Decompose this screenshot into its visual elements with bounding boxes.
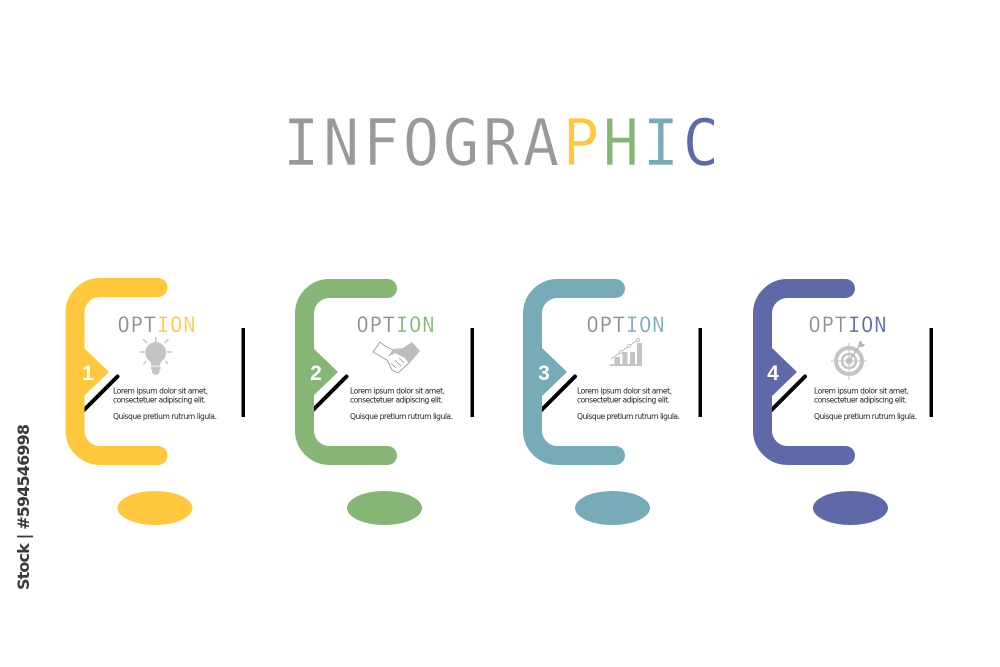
bracket 3	[532, 288, 616, 456]
diagonal line 3	[540, 376, 575, 412]
number 2: 2	[310, 362, 322, 385]
text block 1	[113, 386, 217, 421]
text block 4: consectetuer adipiscing elit.	[814, 396, 907, 404]
diagonal line 1	[82, 376, 118, 412]
text block 4	[814, 386, 917, 421]
number tab 4	[771, 347, 797, 397]
panel: option 4	[762, 288, 933, 525]
text block 1: Quisque pretium rutrum ligula.	[113, 412, 217, 421]
panel: option 3	[532, 288, 702, 525]
text block 2: consectetuer adipiscing elit.	[350, 396, 443, 404]
heading 4: OPTION	[808, 312, 887, 337]
text block 2: Lorem ipsum dolor sit amet,	[350, 386, 445, 396]
vertical line 2	[470, 328, 474, 417]
ellipse 4	[813, 491, 888, 525]
text block 2: Quisque pretium rutrum ligula.	[350, 412, 453, 421]
heading 2: OPTION	[356, 312, 435, 337]
text block 2	[350, 386, 453, 421]
text block 4: Quisque pretium rutrum ligula.	[814, 412, 917, 421]
ellipse 1	[118, 491, 192, 525]
number tab 2	[312, 347, 338, 397]
bracket 4	[762, 288, 846, 456]
number 4: 4	[767, 362, 779, 385]
text block 3: consectetuer adipiscing elit.	[577, 396, 670, 404]
text block 3: Quisque pretium rutrum ligula.	[577, 412, 680, 421]
panel: option 2	[304, 288, 474, 525]
number tab 3	[541, 347, 567, 397]
diagonal line 2	[311, 376, 346, 412]
vertical line 3	[698, 328, 702, 417]
ellipse 2	[347, 491, 422, 525]
text block 1: Lorem ipsum dolor sit amet,	[113, 386, 208, 396]
heading 1: OPTION	[118, 312, 196, 337]
number 3: 3	[538, 362, 550, 385]
stock id label: Stock | #594546998	[14, 424, 34, 590]
bracket 2	[304, 288, 388, 456]
ellipse 3	[575, 491, 650, 525]
text block 3	[577, 386, 680, 421]
bracket 1	[75, 288, 158, 456]
panel: option 1	[75, 288, 245, 525]
diagonal line 4	[770, 376, 805, 412]
text block 3: Lorem ipsum dolor sit amet,	[577, 386, 672, 396]
number 1: 1	[82, 362, 94, 385]
vertical line 1	[242, 328, 245, 417]
icon: handshake	[373, 342, 420, 373]
vertical line 4	[930, 328, 933, 417]
title: INFOGRAPHIC	[283, 105, 723, 180]
text block 4: Lorem ipsum dolor sit amet,	[814, 386, 909, 396]
icon: light bulb	[140, 337, 172, 375]
icon: target	[831, 341, 867, 380]
heading 3: OPTION	[586, 312, 665, 337]
number tab 1	[83, 347, 109, 397]
text block 1: consectetuer adipiscing elit.	[113, 396, 206, 404]
icon: growth chart	[610, 338, 642, 366]
